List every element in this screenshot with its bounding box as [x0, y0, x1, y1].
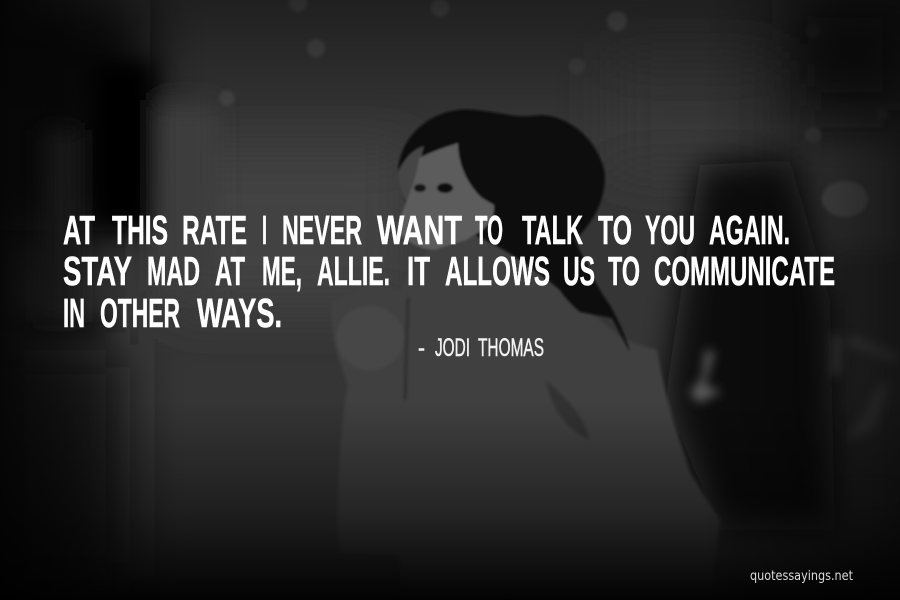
quote line 1: TO: [598, 207, 632, 253]
bokeh lights: [219, 0, 889, 217]
quote line 1: YOU: [645, 207, 695, 253]
figures: hair and face: [397, 109, 630, 352]
quote line 1: RATE: [182, 207, 247, 253]
quote line 2: STAY: [63, 248, 132, 294]
background figure highlights: [690, 335, 900, 440]
quote line 2: ALLIE.: [317, 248, 390, 294]
quote line 2: US: [563, 248, 595, 294]
figures: dress: [332, 232, 720, 600]
quote line 1: [63, 207, 790, 253]
quote line 1: NEVER: [282, 207, 362, 253]
author attribution: THOMAS: [478, 334, 544, 362]
author attribution: [418, 334, 544, 362]
quote line 3: OTHER: [100, 290, 180, 336]
quote line 3: [63, 290, 282, 336]
quote text: [63, 207, 835, 336]
author attribution: -: [418, 334, 425, 362]
background figure silhouette: [665, 160, 835, 530]
quote line 2: ME,: [262, 248, 302, 294]
quote line 2: MAD: [147, 248, 200, 294]
author attribution: JODI: [435, 334, 470, 362]
quote line 2: AT: [215, 248, 245, 294]
quote line 3: WAYS.: [197, 290, 282, 336]
quote line 1: THIS: [112, 207, 168, 253]
quote line 1: AT: [63, 207, 95, 253]
quote line 2: TO: [608, 248, 640, 294]
quote line 2: [63, 248, 835, 294]
quote line 3: IN: [63, 290, 85, 336]
quote line 1: AGAIN.: [709, 207, 790, 253]
quote line 1: WANT: [377, 207, 462, 253]
watermark: quotessayings.net: [750, 569, 853, 584]
quote line 1: TALK: [522, 207, 583, 253]
quote line 2: ALLOWS: [445, 248, 550, 294]
quote line 1: TO: [475, 207, 503, 253]
quote line 1: I: [262, 207, 267, 253]
quote line 2: IT: [407, 248, 430, 294]
